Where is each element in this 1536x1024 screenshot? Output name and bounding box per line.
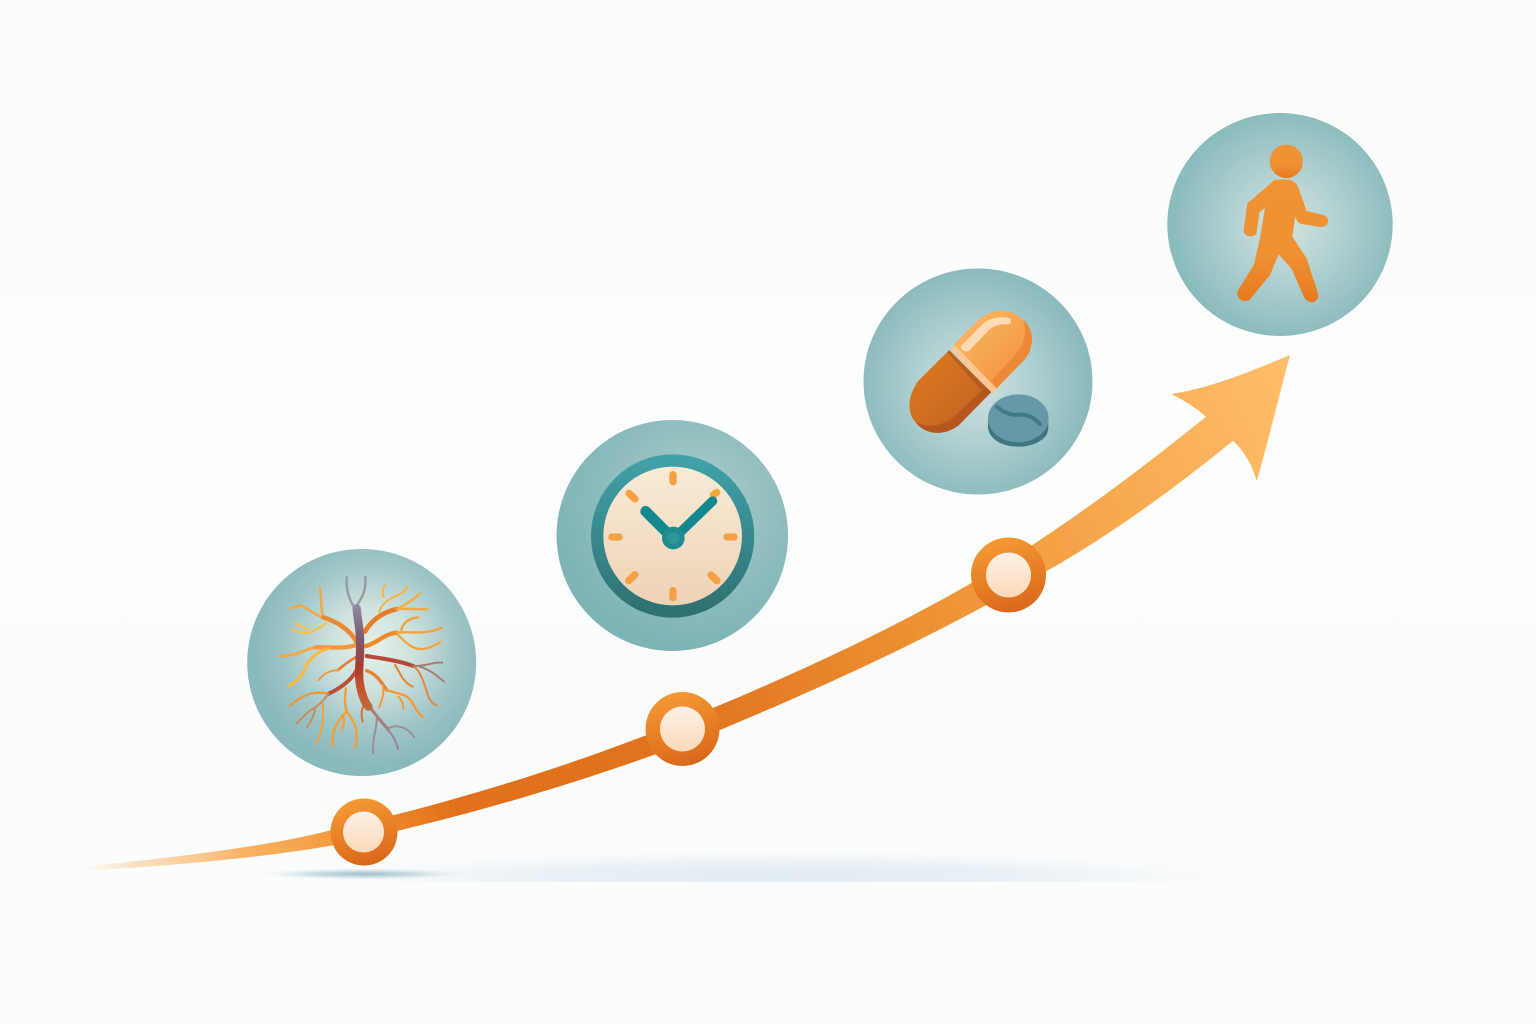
panel: medication — [864, 268, 1092, 494]
icon: capsule and tablet — [909, 311, 1049, 447]
growth arrow — [80, 355, 1290, 871]
panel: clock — [557, 420, 788, 651]
node 3 — [971, 538, 1046, 612]
clock hands — [646, 501, 713, 539]
ground shadow — [274, 858, 1112, 882]
icon: walking figure — [1237, 145, 1328, 302]
icon: clock — [591, 454, 754, 618]
infographic canvas — [88, 113, 1393, 882]
panel: vessel network — [247, 549, 476, 776]
node 1 — [330, 798, 398, 866]
node 2 — [646, 692, 720, 766]
panel: walking person — [1167, 113, 1393, 336]
icon: branching vessels — [281, 577, 444, 753]
